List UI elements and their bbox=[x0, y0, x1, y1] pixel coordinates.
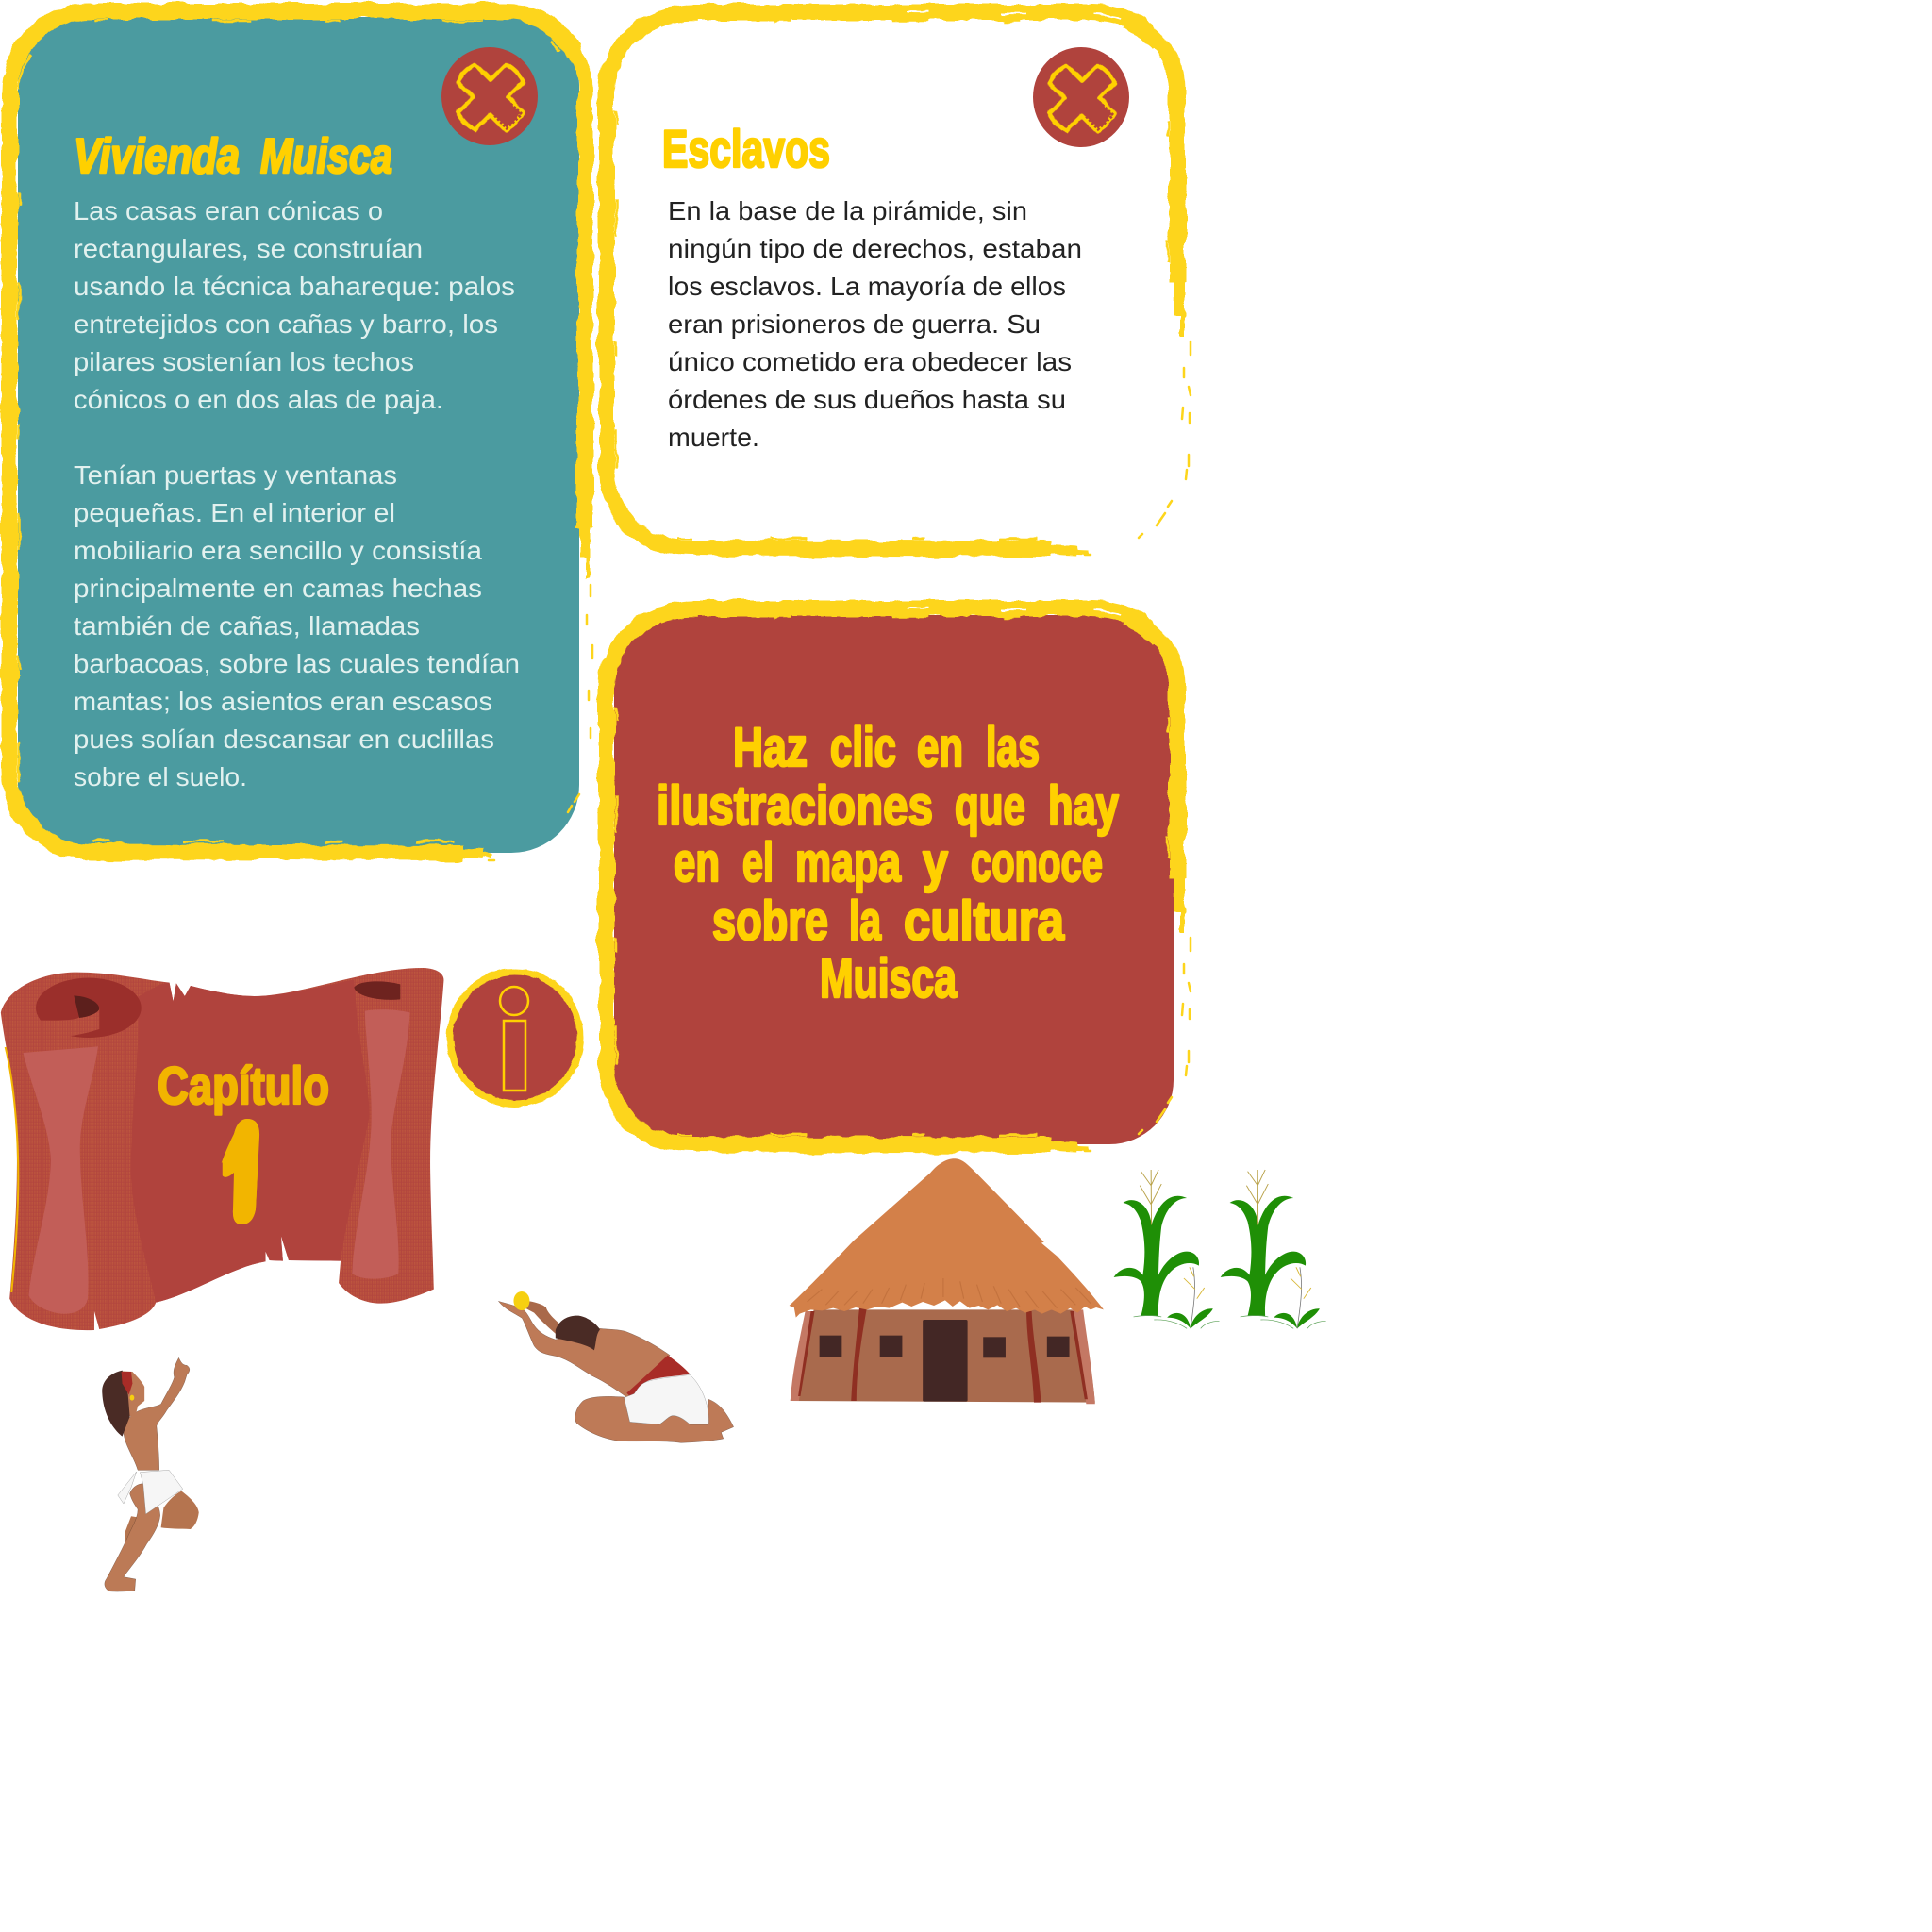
heading: Vivienda Muisca: Vivienda bbox=[74, 129, 240, 184]
illustration: standing figure bbox=[102, 1357, 199, 1591]
white loincloth bbox=[625, 1374, 708, 1424]
heading: instruction text: ilustraciones bbox=[657, 775, 933, 837]
panel background: red card bbox=[614, 615, 1174, 1144]
text block: description of housing bbox=[74, 196, 520, 791]
heading: Esclavos: Esclavos bbox=[662, 119, 830, 178]
brush frame: yellow bbox=[607, 12, 1191, 555]
heading: instruction text: en bbox=[674, 832, 720, 893]
heading: Vivienda Muisca: Muisca bbox=[260, 129, 392, 184]
hair bbox=[102, 1371, 130, 1437]
text block: description of housing: pilares sostenían los techos bbox=[74, 347, 414, 376]
heading: instruction text: hay bbox=[1048, 775, 1119, 837]
scroll right highlight bbox=[352, 1009, 410, 1279]
text block: description of housing: mantas; los asientos eran escasos bbox=[74, 687, 492, 716]
coin bbox=[513, 1291, 529, 1310]
text block: description of housing: rectangulares, se construían bbox=[74, 234, 423, 263]
scroll left highlight bbox=[23, 1046, 98, 1314]
corn plant left bbox=[1114, 1170, 1220, 1328]
face bbox=[122, 1371, 144, 1417]
scroll label: Capítulo: Capítulo bbox=[158, 1056, 329, 1115]
text block: description of housing: Las casas eran cónicas o bbox=[74, 196, 383, 225]
text block: description of housing: también de cañas, llamadas bbox=[74, 611, 420, 641]
standing leg bbox=[105, 1484, 160, 1591]
icon: information button bbox=[450, 972, 580, 1104]
heading: instruction text bbox=[657, 717, 1119, 1009]
panel: Esclavos bbox=[607, 12, 1191, 555]
illustration: kneeling figure offering gold bbox=[498, 1291, 734, 1442]
text block: description of housing: entretejidos con cañas y barro, los bbox=[74, 309, 498, 339]
panel: Vivienda Muisca bbox=[9, 11, 592, 860]
hut walls bbox=[791, 1309, 1095, 1403]
heading: instruction text: Muisca bbox=[820, 948, 958, 1009]
heading: Vivienda Muisca bbox=[74, 129, 392, 184]
scroll right opening bbox=[354, 981, 400, 1000]
illustration: corn plants bbox=[1114, 1170, 1326, 1328]
text block: description of housing: cónicos o en dos alas de paja. bbox=[74, 385, 443, 414]
text block: description of slaves: En la base de la pirámide, sin bbox=[668, 196, 1027, 225]
text block: description of housing: principalmente en camas hechas bbox=[74, 574, 482, 603]
brush frame: yellow bbox=[607, 608, 1191, 1151]
text block: description of housing: pequeñas. En el interior el bbox=[74, 498, 395, 527]
windows bbox=[820, 1336, 1070, 1357]
heading: instruction text: sobre bbox=[712, 891, 828, 952]
text block: description of slaves bbox=[668, 196, 1082, 452]
roof thatch streaks bbox=[808, 1278, 1091, 1308]
hair bbox=[556, 1316, 600, 1350]
heading: instruction text: mapa bbox=[795, 832, 902, 893]
wall side shading bbox=[791, 1309, 1095, 1404]
far foot and raised leg bbox=[125, 1491, 199, 1541]
earring bbox=[130, 1395, 134, 1401]
corn plant right bbox=[1221, 1170, 1326, 1328]
text block: description of housing: sobre el suelo. bbox=[74, 762, 247, 791]
illustration: muisca hut bbox=[790, 1158, 1104, 1404]
text block: description of housing: usando la técnica bahareque: palos bbox=[74, 272, 515, 301]
text block: description of slaves: único cometido era obedecer las bbox=[668, 347, 1072, 376]
text block: description of slaves: eran prisioneros de guerra. Su bbox=[668, 309, 1041, 339]
icon: close button bbox=[440, 46, 541, 148]
heading: instruction text: el bbox=[742, 832, 774, 893]
scroll central sheet bbox=[131, 979, 370, 1303]
scroll number: 1: 1 bbox=[200, 1086, 287, 1260]
heading: instruction text: clic bbox=[830, 717, 896, 778]
scroll gold edge bbox=[6, 1047, 18, 1292]
panel background: teal card bbox=[18, 17, 579, 853]
legs bbox=[575, 1396, 734, 1442]
headband bbox=[122, 1372, 132, 1394]
text block: description of housing: Tenían puertas y ventanas bbox=[74, 460, 397, 490]
text block: description of housing: barbacoas, sobre las cuales tendían bbox=[74, 649, 520, 678]
text block: description of slaves: los esclavos. La mayoría de ellos bbox=[668, 272, 1066, 301]
white loincloth bbox=[118, 1470, 183, 1514]
text block: description of housing: pues solían descansar en cuclillas bbox=[74, 724, 494, 754]
brush frame: yellow bbox=[9, 11, 592, 860]
heading: instruction text: y bbox=[923, 832, 948, 893]
scroll left opening bbox=[36, 978, 142, 1038]
panel: instruction card bbox=[607, 608, 1191, 1151]
heading: instruction text: en bbox=[917, 717, 963, 778]
near arm and torso bbox=[498, 1301, 670, 1398]
icon: close button bbox=[1031, 47, 1133, 149]
heading: instruction text: cultura bbox=[904, 891, 1065, 952]
heading: instruction text: la bbox=[849, 891, 882, 952]
scroll shape bbox=[1, 968, 443, 1330]
heading: instruction text: conoce bbox=[971, 832, 1103, 893]
far arm bbox=[525, 1301, 563, 1337]
text block: description of housing: mobiliario era sencillo y consistía bbox=[74, 536, 482, 565]
text block: description of slaves: muerte. bbox=[668, 423, 759, 452]
text block: description of slaves: órdenes de sus dueños hasta su bbox=[668, 385, 1066, 414]
text block: description of slaves: ningún tipo de derechos, estaban bbox=[668, 234, 1082, 263]
torso and arm bbox=[124, 1357, 190, 1470]
illustration: chapter scroll bbox=[1, 968, 443, 1330]
door bbox=[923, 1320, 968, 1402]
heading: instruction text: Haz bbox=[733, 717, 808, 778]
thatched roof bbox=[790, 1158, 1104, 1318]
heading: instruction text: las bbox=[986, 717, 1040, 778]
heading: instruction text: que bbox=[955, 775, 1025, 837]
wooden posts bbox=[798, 1308, 1088, 1403]
red belt bbox=[626, 1356, 690, 1398]
